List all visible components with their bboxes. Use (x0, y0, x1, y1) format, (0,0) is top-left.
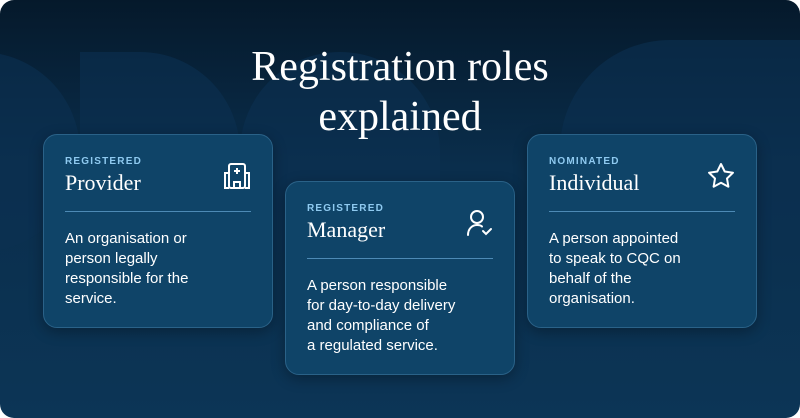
panel: individual: Individual (549, 170, 639, 195)
panel: provider: responsible for the (65, 270, 188, 287)
panel: manager: and compliance of (307, 317, 429, 334)
panel: individual: NOMINATED (549, 156, 620, 167)
icon: hospital (224, 163, 250, 189)
panel: individual (527, 134, 757, 328)
panel: provider: An organisation or (65, 230, 187, 247)
panel: individual: organisation. (549, 290, 635, 307)
panel: individual: to speak to CQC on (549, 250, 681, 267)
panel: provider (43, 134, 273, 328)
panel: individual: A person appointed (549, 230, 678, 247)
title: explained (318, 94, 482, 140)
panel: manager: A person responsible (307, 277, 447, 294)
title: Registration roles (251, 44, 549, 90)
panel: provider: person legally (65, 250, 158, 267)
panel: manager: Manager (307, 217, 385, 242)
panel: manager: REGISTERED (307, 203, 384, 214)
panel: provider: REGISTERED (65, 156, 142, 167)
title (251, 44, 549, 140)
panel: manager: for day-to-day delivery (307, 297, 455, 314)
panel: manager: a regulated service. (307, 337, 438, 354)
panel: provider: service. (65, 290, 117, 307)
icon: star (708, 163, 734, 188)
panel: provider: Provider (65, 170, 141, 195)
panel: manager (285, 181, 515, 375)
panel: individual: behalf of the (549, 270, 632, 287)
icon: person check (467, 210, 492, 236)
